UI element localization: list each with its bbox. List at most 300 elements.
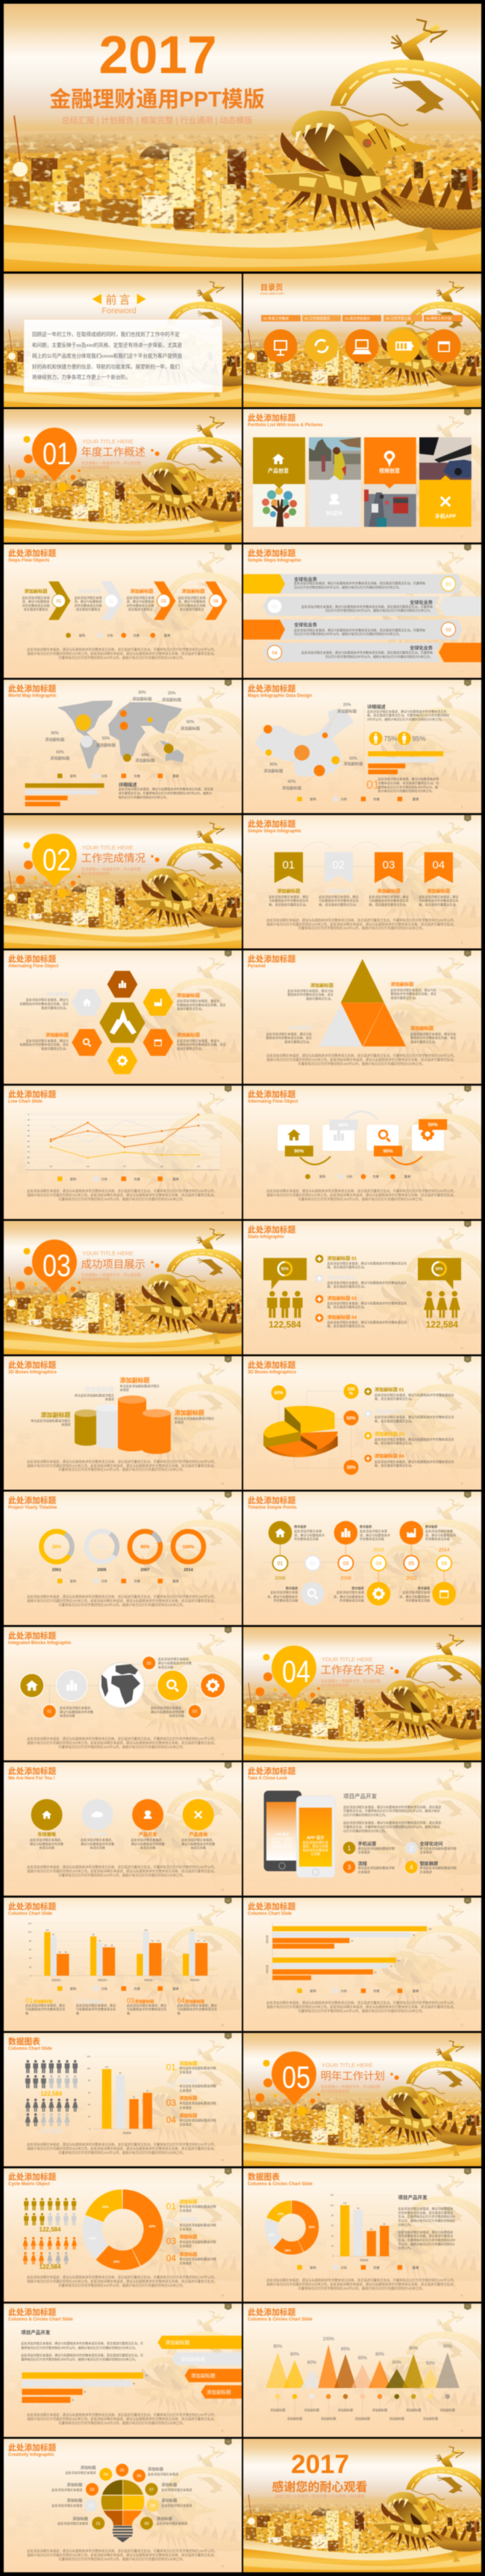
legend: 架构 (310, 1988, 316, 1994)
slide title: 6 (228, 546, 229, 549)
column chart: 添加标题 3 (144, 1979, 154, 1982)
timeline axis and nodes: 2010 (373, 1548, 384, 1553)
map labels: 90% (51, 731, 59, 735)
small nodes: 02 (147, 1662, 151, 1666)
map labels: 添加副标题 (162, 697, 181, 703)
step texts: 与标题相关并符合整体语言风 (319, 898, 359, 902)
slide title (248, 681, 469, 808)
panel: section 01 (4, 409, 242, 542)
labels: 本描述 (105, 1396, 114, 1401)
product text: 尽量简洁生动。尽量将每页幻灯片的字数控制在200字以内，据统计每页 (343, 1809, 440, 1813)
pin bubbles: 60% (274, 1392, 284, 1396)
bar chart: 添加标题 (266, 1935, 269, 1944)
numbered notes: 文本描述 (179, 2227, 192, 2231)
section title: 成功项目展示 (81, 1258, 146, 1271)
numbered text: 01 (366, 779, 380, 791)
timeline axis and nodes: 04 (376, 1561, 381, 1566)
numbered notes: 03 (166, 2097, 176, 2108)
slide title (248, 410, 469, 538)
world map (57, 700, 184, 769)
product text: 项目产品开发 (21, 2329, 51, 2336)
legend: 重建 (404, 1174, 411, 1179)
product text: 此处添加详细文本描述，建议与标题相关并符合整体语言风格，语言描述 (343, 1821, 441, 1825)
legend: 分析 (107, 632, 113, 638)
step texts: 添加副标题 (327, 888, 351, 894)
legend (57, 1579, 179, 1584)
legend (305, 1174, 411, 1179)
pin bubbles: 30% (346, 1466, 356, 1471)
petal labels: 添加标题 (81, 2464, 96, 2470)
icon circles (31, 1799, 214, 1830)
numbered notes: 单击此处添加副标题或详细 (179, 2256, 216, 2261)
legend: 重建 (413, 1988, 419, 1994)
column chart: 100 (190, 1929, 194, 1932)
slide title (248, 1222, 469, 1350)
numbered notes: 单击此处添加副标题或详细 (179, 2204, 216, 2208)
detail text: 详细描述 (119, 782, 137, 788)
slide title: World Map Infographic (8, 694, 57, 698)
bar chart: 50 (84, 2390, 87, 2393)
step texts: 并符合整体语言风格 (178, 603, 205, 607)
dark phone: 标题相关并符合 (271, 1844, 294, 1849)
numbered notes: 与标题相关并符合整体语言风 (25, 2006, 65, 2011)
step texts: 页幻灯片的字数控制在200字以内，据统计每页幻灯片的最好控制在5分钟之内。 (325, 608, 433, 612)
legend: 分析 (101, 1579, 107, 1584)
timeline text: 此处添加详细文本描 (402, 1590, 430, 1595)
circle texts: 体语言风格 (39, 1845, 54, 1850)
slide title: 8 (228, 681, 229, 684)
dark phone: 本描述，建议与 (271, 1840, 293, 1845)
slide title: 14 (221, 1212, 224, 1215)
slide title (8, 2305, 230, 2433)
slide title: 18 (221, 1483, 224, 1486)
slide title: Pyramid (248, 964, 266, 969)
section title: YOUR TITLE HERE (322, 2062, 373, 2069)
dots and labels: 添加副标题 (287, 2416, 302, 2420)
slide title (8, 2170, 230, 2297)
left stat: 122,584 (269, 1319, 301, 1330)
slide title (248, 1764, 469, 1891)
text blocks: 此处添加详细文本描述，建议与 (26, 997, 69, 1002)
column chart: 50 (65, 1950, 67, 1953)
line chart: 40 (27, 1134, 30, 1137)
description: 据统计每页幻灯片的最好控制在5分钟之内。此处添加详细文本描述，建议与标题相关并符合整体语言风格，语言描述尽量简洁生动。 (266, 1193, 457, 1198)
slide title: 此处添加标题 (8, 1631, 56, 1641)
product text: 此处添加详细文本描述，建议与标题相关 (398, 2229, 453, 2234)
column chart: 65 (110, 1944, 113, 1947)
node texts: 建议与标题相关并符合整 (151, 1709, 184, 1714)
numbered notes: 添加副标题 (84, 1998, 104, 2004)
slide title (248, 546, 469, 673)
circle texts: 产品开发 (139, 1832, 157, 1838)
line chart: 1/9 (49, 1165, 52, 1168)
slide title: 30 (227, 2170, 230, 2173)
triangle chart: 50% (426, 2362, 436, 2366)
ring labels: 2001 (52, 1568, 61, 1572)
list items: 格，语言描述尽量简洁生动。 (375, 1463, 414, 1468)
section number bubble (32, 427, 77, 481)
slide title: Simple Steps Infographic (248, 559, 302, 563)
petal labels: 添加标题 (148, 2466, 163, 2472)
numbered notes: 格 (127, 2011, 130, 2015)
list items: 此处添加详细文本描述，建议与标题相关并符合整体语言风 (375, 1415, 454, 1419)
slide title: Alternating Flow Object (8, 964, 58, 969)
step texts: 添加副标题 (25, 588, 48, 594)
numbered petals: 05 (120, 2469, 125, 2473)
step texts: 述，建议与标题相关 (75, 599, 101, 603)
timeline text: 此处添加详细文本描 (337, 1590, 364, 1595)
numbered petals: 04 (104, 2473, 108, 2478)
bar chart: 40 (72, 2398, 75, 2401)
slide title: 此处添加标题 (8, 684, 56, 694)
step texts: 语言描述尽量简洁 (24, 607, 48, 612)
step texts: 语言描述尽量简洁 (76, 607, 100, 612)
timeline text: 数字图表 (352, 1586, 364, 1590)
legend: 分析 (341, 797, 347, 802)
node texts: 体语言风格 (169, 1713, 184, 1718)
column chart: 90 (119, 2072, 122, 2075)
slide title (8, 1357, 230, 1486)
donut chart: 19% (269, 2233, 275, 2237)
timeline axis and nodes: 06 (441, 1561, 447, 1566)
pictogram women: 122,584 (40, 2264, 61, 2270)
legend: 分析 (346, 1174, 353, 1179)
legend: 分析 (101, 773, 107, 779)
circle texts: 建议与标题相关并符合整 (81, 1841, 114, 1846)
text blocks: 添加副标题 (289, 1025, 313, 1031)
slide title: 此处添加标题 (8, 2173, 56, 2182)
panel: stats (243, 1221, 481, 1354)
slide title: Creativity Infographic (8, 2453, 54, 2457)
map labels: 添加副标题 (50, 755, 69, 761)
step bands: 03 (445, 627, 451, 632)
line chart: 0 (28, 1113, 29, 1116)
dots and labels: 添加副标题 (338, 2407, 353, 2412)
map labels: 添加副标题 (135, 757, 154, 763)
line chart: 50 (27, 1140, 30, 1143)
slide title: 21 (460, 1618, 463, 1621)
column chart: 100 (46, 1929, 49, 1932)
right stat: 50% (435, 1267, 443, 1272)
step texts: 此处添加详细文本描述，建议与标题相关并符合整体语言风格，语言描述尽量简洁生动。尽量将每 (294, 627, 425, 632)
slide title (8, 1899, 230, 2026)
labels: 添加副标题 (119, 1377, 149, 1384)
panel: line chart (4, 1086, 242, 1219)
list items: 添加副标题 03 (327, 1295, 357, 1301)
slide title: 此处添加标题 (8, 1090, 56, 1099)
numbered notes: 与标题相关并符合整体语言风 (76, 2006, 116, 2011)
numbered notes: 文本描述 (179, 2105, 192, 2109)
timeline axis and nodes: 2006 (275, 1576, 286, 1581)
heading: contents: 目录页 (260, 283, 283, 292)
timeline text: 此处添加详细文本描 (270, 1590, 298, 1595)
petal labels: 添加标题 (161, 2482, 177, 2488)
pictogram women: 122,584 (40, 2128, 63, 2134)
arrow labels (157, 2336, 242, 2398)
numbered notes: 04 (178, 1997, 185, 2004)
description: 此处添加详细文本描述，建议与标题相关并符合整体语言风格，语言描述尽量简洁生动。尽量将每页幻灯片的字数控制在200字以内， (27, 2142, 217, 2147)
numbered notes: 与标题相关并符合整体语言风 (178, 2006, 217, 2011)
list items (364, 1387, 454, 1468)
slide title: 19 (466, 1357, 469, 1360)
numbered text: 统计每页幻灯片的最好控制在5分钟之内。 (378, 788, 434, 793)
donut chart: 19% (284, 2249, 291, 2252)
petal labels: 添加标题 (67, 2497, 82, 2503)
numbered petals: 01 (96, 2522, 101, 2526)
column chart: 75 (197, 1940, 200, 1943)
timeline text: 此处添加详细文本描 (425, 1529, 453, 1533)
legend (57, 1986, 179, 1991)
column chart: 80 (88, 2079, 90, 2082)
labels: 单击此处添加副标题或详细文 (31, 1419, 70, 1423)
description (27, 1459, 217, 1472)
description (27, 1188, 217, 1201)
text blocks: 描述尽量简洁生动。 (391, 996, 418, 1000)
step texts: 此处添加详细文本描 (75, 595, 101, 600)
pictogram men: 122,584 (40, 2090, 63, 2097)
list items: 此处添加详细文本描述，建议与标题相关并符合整体语言风 (327, 1319, 407, 1324)
petal labels: 此处添加详细文本描述 (57, 2521, 88, 2525)
numbered notes: 添加标题 (179, 2217, 197, 2222)
slide title: 3D Boxes Infographics (8, 1371, 57, 1375)
step texts: 添加副标题 (277, 888, 301, 894)
numbered notes: 02 (166, 2080, 176, 2090)
circle texts: 此处添加详细文本描述， (131, 1838, 165, 1842)
connectors (267, 842, 458, 867)
column chart: 20 (88, 2115, 90, 2118)
numbered items: 2 (410, 1844, 413, 1852)
slide title: 此处添加标题 (8, 1495, 56, 1505)
description: 尽量将每页幻灯片的字数控制在200字以内，据统计每页幻灯片的最好控制在5分钟之内。 (58, 2421, 186, 2426)
step texts: 此处添加详细文本描 (178, 595, 205, 600)
contents tags: 02.工作完成情况 (304, 315, 330, 321)
panel: table of contents (243, 274, 481, 407)
slide title: 此处添加标题 (248, 1902, 295, 1911)
list items: 格，语言描述尽量简洁生动。 (375, 1441, 414, 1445)
right stat (418, 1258, 461, 1330)
description (266, 1188, 457, 1201)
description: 尽量将每页幻灯片的字数控制在200字以内，据统计每页幻灯片的最好控制在5分钟之内。 (58, 1196, 186, 1201)
pin bubbles: 50% (346, 1417, 356, 1421)
legend (66, 632, 171, 638)
donut chart: 19% (278, 2212, 284, 2216)
ring labels: 2005 (97, 1568, 107, 1572)
section title: YOUR TITLE HERE (82, 844, 134, 851)
slide title: 30 (221, 2294, 224, 2297)
petal labels (51, 2464, 192, 2525)
donut labels: 43% (148, 2225, 156, 2228)
slide title: 22 (221, 1753, 224, 1756)
slide title: 27 (460, 2023, 463, 2026)
column chart: 80 (29, 1939, 31, 1942)
slide title: 32 (221, 2430, 224, 2433)
triangle chart: 80% (290, 2353, 300, 2357)
light bulb (101, 2479, 146, 2542)
slide title: Columns & Circles Chart Slide (248, 2182, 313, 2187)
column chart: 添加标题 (360, 2259, 369, 2262)
panel: 3d cylinders (4, 1356, 242, 1490)
arrow labels: 添加副标题 (181, 2355, 206, 2362)
petal labels: 此处添加详细文本描述 (51, 2487, 82, 2492)
heading: page directory: PAGE DIRECTORY (260, 292, 284, 295)
slide title (8, 1764, 230, 1891)
text blocks: 描述尽量简洁生动。 (284, 1040, 312, 1044)
map labels (45, 691, 200, 763)
text blocks: 描述尽量简洁生动。 (177, 1046, 204, 1051)
section number bubble: 05 (282, 2060, 310, 2095)
numbered notes (166, 2199, 216, 2265)
slide title: 34 (221, 2565, 224, 2568)
chevrons: 01 (56, 600, 62, 604)
pyramid (319, 959, 406, 1046)
text blocks (19, 992, 225, 1051)
step texts (294, 577, 434, 659)
column chart: 100 (330, 2204, 334, 2207)
timeline text: 述，建议与标题相关并 (267, 1594, 298, 1598)
list items: 添加副标题 04 (327, 1314, 357, 1320)
triangle chart: 100% (323, 2337, 335, 2342)
numbered notes: 文本描述 (179, 2122, 192, 2126)
text blocks: 描述尽量简洁生动。 (306, 996, 334, 1001)
triangle chart: 85% (341, 2348, 351, 2352)
contents tags (261, 315, 463, 321)
ribbons (275, 852, 453, 883)
numbered notes: 单击此处添加副标题或详细 (179, 2118, 216, 2123)
numbered notes: 文本描述 (179, 2070, 192, 2074)
decorative dots (255, 2060, 399, 2116)
text blocks: 添加副标题 (410, 1025, 434, 1031)
step bands: 02 (272, 604, 278, 609)
legend: 架构 (70, 773, 76, 779)
petal labels: 添加标题 (157, 2516, 172, 2522)
node texts: 此处添加详细文本描述， (151, 1705, 184, 1709)
list items: 添加副标题 01 (375, 1387, 404, 1393)
product text: 项目产品开发 (343, 1792, 378, 1800)
ring labels: 100% (183, 1545, 195, 1550)
map labels: 添加副标题 (132, 696, 151, 702)
map labels: 60% (56, 750, 64, 755)
list items: 此处添加详细文本描述，建议与标题相关并符合整体语言风 (375, 1392, 454, 1397)
column chart: 0 (332, 2255, 334, 2258)
section title: 的介绍或简要说明 (81, 465, 110, 470)
slide title: 9 (467, 681, 469, 684)
numbered notes: 此处添加详细文本描述，建议 (25, 2002, 65, 2007)
timeline text: 述，建议与标题相关并 (294, 1533, 325, 1537)
panel: section 05 (243, 2033, 481, 2167)
description (27, 2548, 217, 2562)
description: 尽量将每页幻灯片的字数控制在200字以内，据统计每页幻灯片的最好控制在5分钟之内。 (298, 1061, 425, 1066)
slide title: 28 (221, 2159, 224, 2162)
right stat: 122,584 (426, 1319, 458, 1330)
numbered items (343, 1841, 457, 1873)
slide title: 27 (466, 1899, 469, 1902)
list items: 添加副标题 02 (327, 1275, 357, 1281)
timeline text: 此处添加详细文本描 (360, 1529, 387, 1533)
legend: 重建 (413, 797, 419, 802)
map labels: 50% (141, 753, 149, 758)
cards: 80% (339, 1123, 348, 1128)
panel: people and columns (4, 2033, 242, 2167)
step texts: 并符合整体语言风格 (75, 603, 101, 607)
section title: 在这里输入一些描述文字，可以是封面 (81, 460, 141, 465)
section title: 明年工作计划 (321, 2070, 385, 2082)
description: 此处添加详细文本描述，建议与标题相关并符合整体语言风格，语言描述尽量简洁生动。尽量将每页幻灯片的字数控制在200字以内， (266, 917, 457, 923)
column chart: 60 (383, 2222, 386, 2225)
column chart: 添加标题 (122, 2132, 131, 2134)
tile: tree picture (253, 483, 305, 527)
circle texts: 市场策略 (37, 1832, 57, 1838)
list items: 格，语言描述尽量简洁生动。 (327, 1284, 367, 1289)
step texts: 与标题相关并符合整体语言风 (269, 898, 308, 902)
panel: pyramid (243, 950, 481, 1084)
map labels: 添加副标题 (263, 767, 283, 773)
column chart: 100 (343, 2202, 347, 2205)
numbered notes: 01 (25, 1997, 33, 2004)
icon circles (269, 1521, 456, 1606)
text blocks: 添加副标题 (391, 981, 414, 987)
slide title: 25 (466, 1764, 469, 1767)
donut labels: 19% (90, 2237, 96, 2240)
slide title: 3D Boxes Infographics (248, 1371, 297, 1375)
timeline text: 符合整体语言风格 (405, 1598, 430, 1603)
step texts (22, 588, 205, 612)
description: 据统计每页幻灯片的最好控制在5分钟之内。此处添加详细文本描述，建议与标题相关并符合整体语言风格，语言描述尽量简洁生动。 (27, 2146, 217, 2152)
column chart: 添加标题 1 (51, 1979, 62, 1982)
panel: horizontal bars (243, 1897, 481, 2031)
legend: 重建 (172, 1176, 179, 1181)
labels: 单击此处添加副标题或详细文 (75, 1393, 114, 1398)
step texts: 并符合整体语言风格 (127, 603, 154, 607)
legend: 架构 (70, 1986, 76, 1991)
column chart: 0 (89, 2127, 90, 2130)
dots and labels: 添加副标题 (440, 2407, 455, 2412)
slide title: 5 (461, 535, 463, 538)
tile: photo castle (309, 437, 361, 480)
timeline axis and nodes: 05 (408, 1561, 414, 1566)
step texts: 添加副标题 (131, 588, 154, 594)
bar chart: 65 (375, 1970, 377, 1973)
step texts: 此处添加详细文本描 (22, 595, 49, 600)
circle texts: 体语言风格 (190, 1845, 206, 1850)
light phone (296, 1796, 335, 1878)
step texts: 全球化业务 (410, 645, 434, 651)
small nodes: 01 (47, 1710, 51, 1715)
timeline text: 数字图表 (425, 1524, 437, 1528)
step bands: 04 (272, 650, 278, 656)
person stats (369, 732, 426, 745)
column chart: 60 (88, 2091, 90, 2094)
list items: 此处添加详细文本描述，建议与标题相关并符合整体语言风 (327, 1261, 407, 1266)
cards: 90% (294, 1149, 304, 1155)
slide title: 13 (466, 952, 469, 955)
numbered notes: 单击此处添加副标题或详细 (179, 2222, 216, 2227)
legend (57, 773, 179, 779)
description: 此处添加详细文本描述，建议与标题相关并符合整体语言风格，语言描述尽量简洁生动。尽量将每页幻灯片的字数控制在200字以内， (27, 647, 217, 652)
description: 据统计每页幻灯片的最好控制在5分钟之内。此处添加详细文本描述，建议与标题相关并符合整体语言风格，语言描述尽量简洁生动。 (27, 2416, 217, 2422)
slide title: 28 (227, 2035, 230, 2038)
text blocks: 此处添加详细文本描述，建议与 (177, 1038, 219, 1043)
text blocks: 此处添加详细文本描述，建议与标 (266, 1031, 312, 1036)
slide title: 15 (460, 1212, 463, 1215)
description: 尽量将每页幻灯片的字数控制在200字以内，据统计每页幻灯片的最好控制在5分钟之内。 (58, 2283, 186, 2288)
column chart: 75 (157, 1940, 160, 1943)
slide title: 19 (460, 1483, 463, 1486)
description (266, 2278, 457, 2291)
timeline axis and nodes: 02 (310, 1561, 316, 1566)
step texts: 页幻灯片的字数控制在200字以内，据统计每页幻灯片的最好控制在5分钟之内。 (294, 585, 401, 589)
description: 尽量将每页幻灯片的字数控制在200字以内，据统计每页幻灯片的最好控制在5分钟之内。 (58, 2557, 186, 2562)
timeline text: 符合整体语言风格 (273, 1598, 298, 1603)
